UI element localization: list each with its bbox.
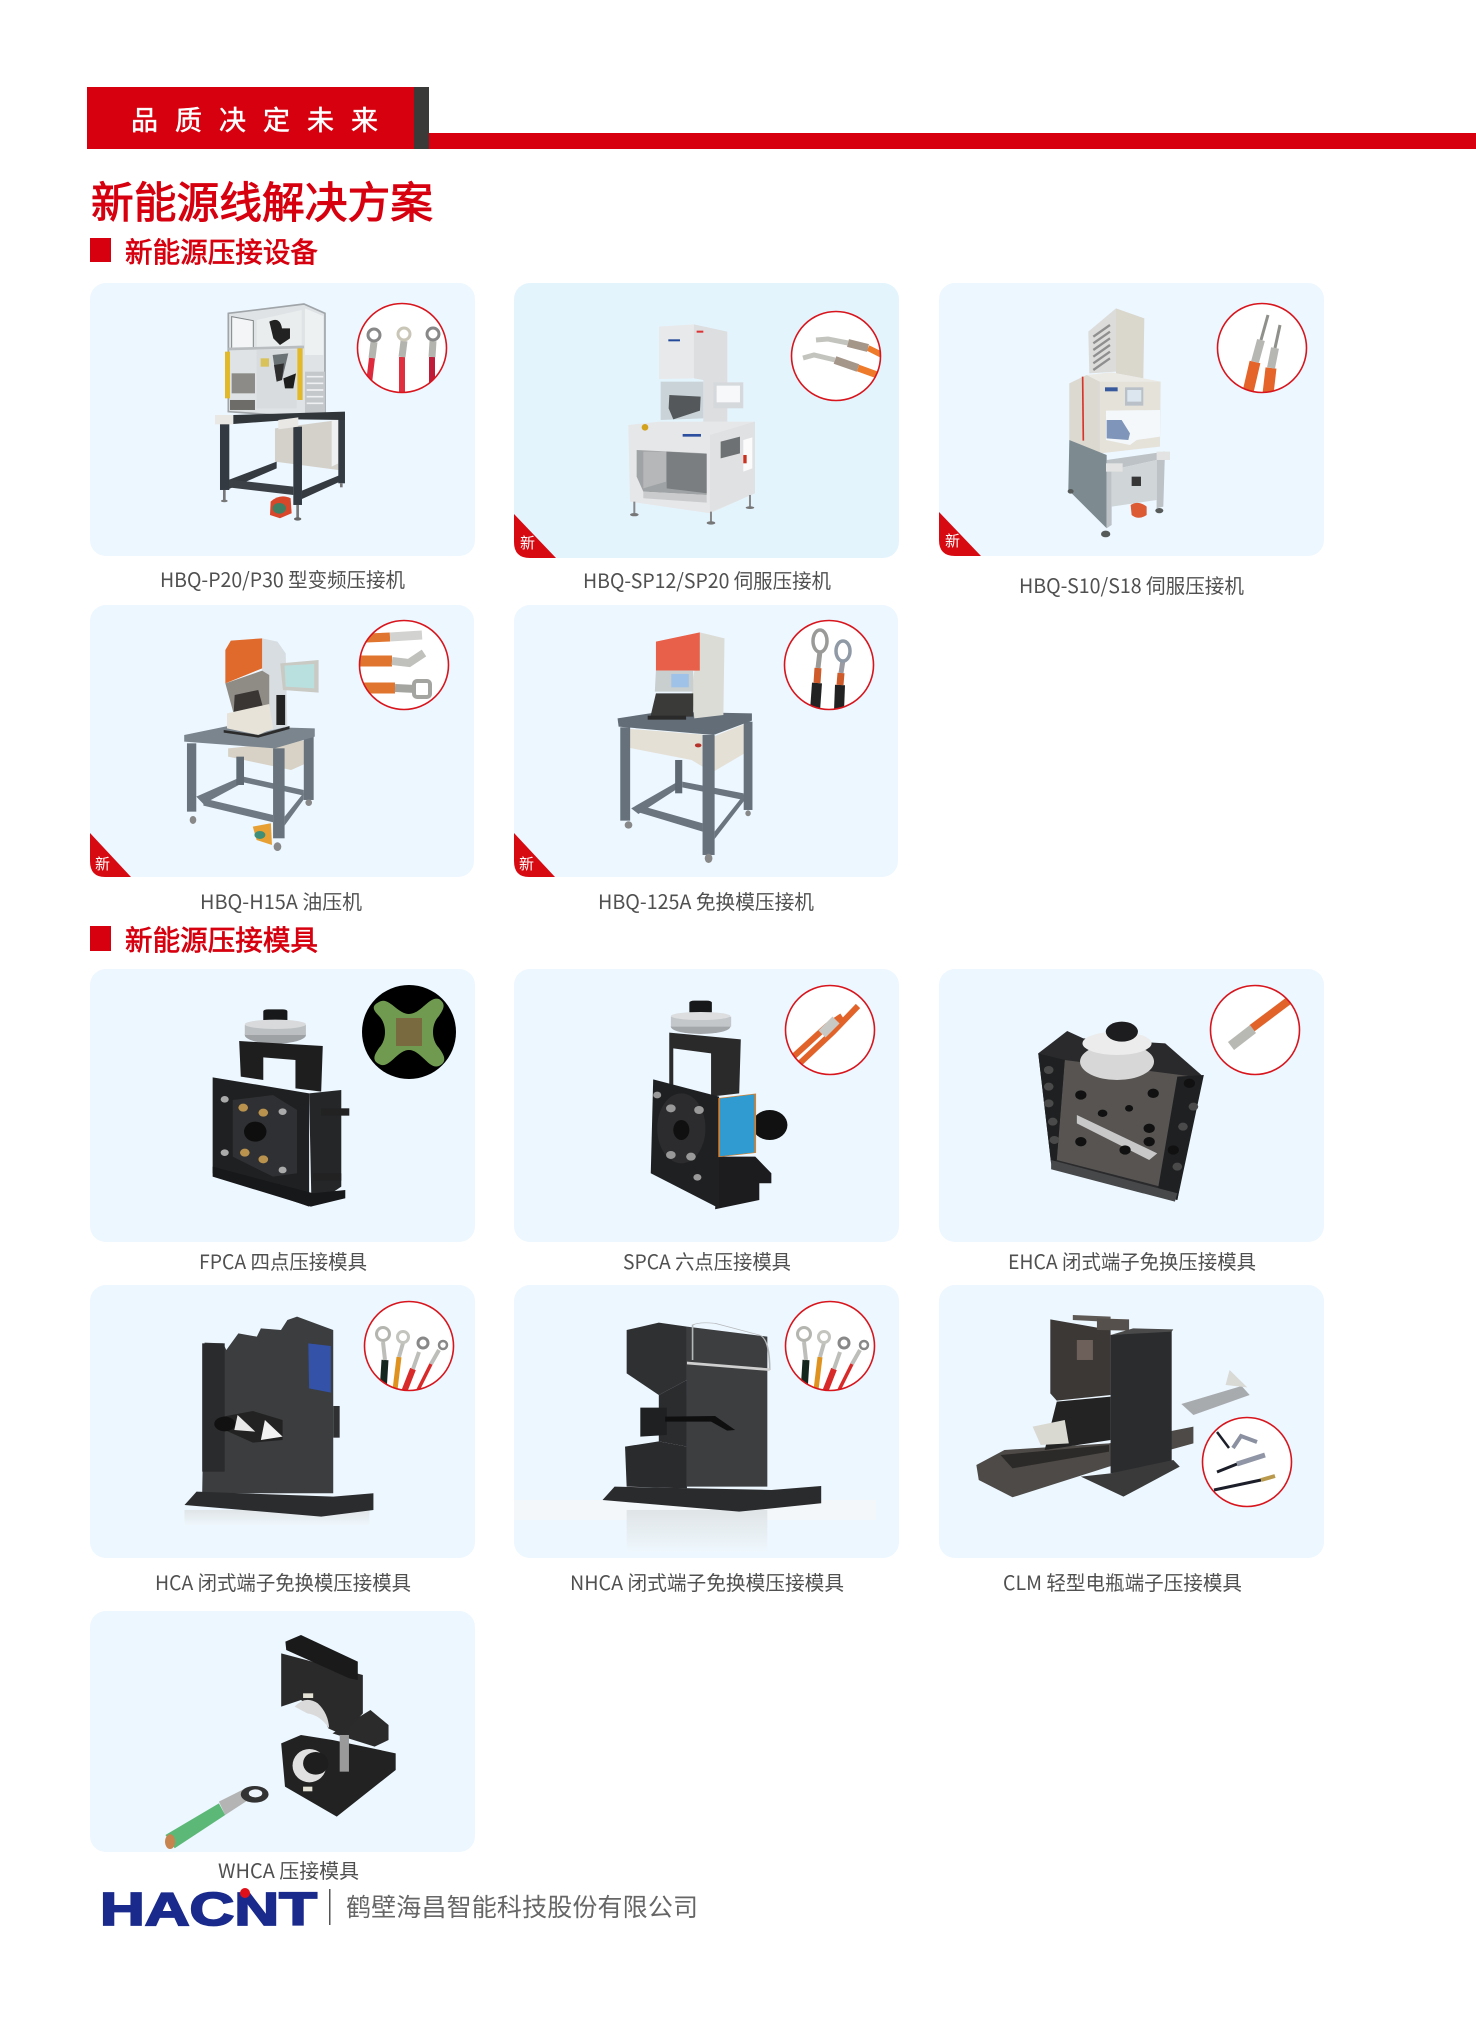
panel: HBQ-125A [514,605,898,915]
die: NHCA [514,1323,876,1552]
caption: HBQ-125A 免换模压接机 [598,886,814,915]
badge: 新 [939,512,981,556]
logo: HACNT [100,1883,330,1935]
heading: 新能源压接模具: 新能源压接模具 [125,919,318,959]
panel: NHCA [514,1285,899,1596]
banner: 品质决定未来 [87,87,1476,149]
die: SPCA six-point [651,1001,787,1209]
panel: CLM [939,1285,1324,1596]
caption: HBQ-SP12/SP20 伺服压接机 [583,565,831,594]
heading: 新能源压接设备: 新能源压接设备 [125,231,318,271]
die: CLM [976,1315,1250,1497]
caption: NHCA 闭式端子免换模压接模具 [570,1567,844,1596]
panel: WHCA [90,1611,475,1884]
machine: HBQ-125A press [618,632,752,863]
machine: HBQ-S10/S18 press [1068,308,1170,537]
caption: HBQ-S10/S18 伺服压接机 [1019,570,1244,599]
caption: HBQ-P20/P30 型变频压接机 [160,564,405,593]
inset: four ring terminals [364,1302,454,1392]
banner: 品质决定未来: 品质决定未来 [131,99,378,138]
badge: 新: 新 [520,532,535,553]
die: WHCA with lug [165,1635,396,1849]
machine: HBQ-P20/P30 press [215,304,345,521]
panel: HBQ-S10/S18 [939,283,1324,599]
machine: HBQ-H15A hydraulic press [184,638,319,851]
inset: ring lugs on black cable [784,620,874,711]
inset: small cable terminals [1202,1418,1292,1506]
die: EHCA [1038,1022,1204,1202]
machine: HBQ-SP12/SP20 press [628,324,755,525]
company name: 鹤壁海昌智能科技股份有限公司 [346,1888,698,1924]
inset: orange cables with terminals [792,312,882,400]
badge: 新: 新 [95,853,110,874]
logo: HACNT: HACNT [100,1883,317,1935]
inset: orange cable with sleeve [1210,986,1300,1074]
inset: four ring terminals [786,1302,874,1392]
panel: EHCA [939,969,1324,1275]
panel: HBQ-H15A [90,605,474,915]
caption: SPCA 六点压接模具 [623,1246,791,1275]
panel: HBQ-SP12/SP20 [514,283,899,594]
caption: CLM 轻型电瓶端子压接模具 [1003,1567,1242,1596]
badge: 新: 新 [519,853,534,874]
badge: 新 [90,833,131,877]
title: 新能源线解决方案 [91,169,433,231]
caption: WHCA 压接模具 [218,1855,359,1884]
caption: FPCA 四点压接模具 [199,1246,367,1275]
caption: HBQ-H15A 油压机 [200,886,362,915]
badge: 新: 新 [945,530,960,551]
die: HCA [185,1317,373,1525]
panel: SPCA [514,969,899,1275]
panel: HCA [90,1285,475,1596]
die: FPCA four-point [213,1009,349,1207]
inset: crimp cross-section [362,985,456,1079]
caption: EHCA 闭式端子免换压接模具 [1008,1246,1256,1275]
panel: FPCA [90,969,475,1275]
badge: 新 [514,514,556,558]
inset: ring terminals on red wire [358,304,446,394]
inset: twin orange cables [786,986,874,1074]
inset: orange cables with lugs [358,620,448,710]
panel: HBQ-P20/P30 [90,283,475,593]
caption: HCA 闭式端子免换模压接模具 [155,1567,411,1596]
badge: 新 [514,833,555,877]
inset: orange cables with pins [1218,304,1306,394]
